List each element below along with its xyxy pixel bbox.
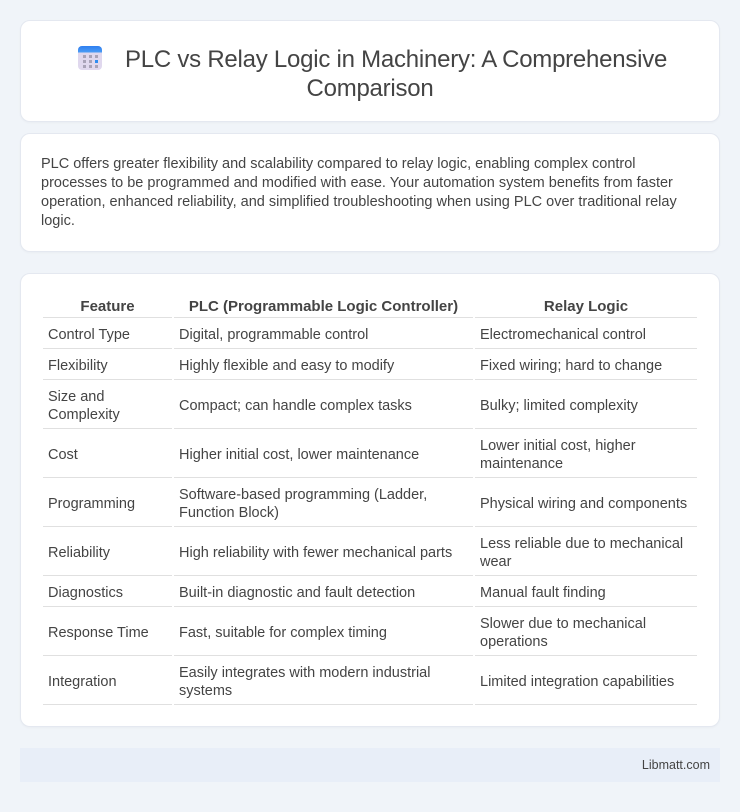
footer source text: Libmatt.com xyxy=(642,758,710,772)
table: Flexibility xyxy=(48,358,108,374)
table: Fast, suitable for complex timing xyxy=(179,625,387,641)
table: Bulky; limited complexity xyxy=(480,398,638,414)
table: PLC (Programmable Logic Controller) xyxy=(189,298,458,315)
table: Less reliable due to mechanical xyxy=(480,536,683,552)
panel: comparison table xyxy=(20,273,720,727)
table: Physical wiring and components xyxy=(480,496,687,512)
heading: Comparison xyxy=(306,75,434,102)
table: Compact; can handle complex tasks xyxy=(179,398,412,414)
table: Size and xyxy=(48,389,104,405)
table: Slower due to mechanical xyxy=(480,616,646,632)
table: Lower initial cost, higher xyxy=(480,438,636,454)
table: Control Type xyxy=(48,327,130,343)
table: Software-based programming (Ladder, xyxy=(179,487,427,503)
table: Manual fault finding xyxy=(480,585,606,601)
intro paragraph: processes to be programmed and modified with ease. Your automation system benefits from faster xyxy=(41,175,673,191)
panel: intro text xyxy=(20,133,720,252)
table: Integration xyxy=(48,674,117,690)
table: Built-in diagnostic and fault detection xyxy=(179,585,415,601)
table header xyxy=(80,298,628,315)
table: Digital, programmable control xyxy=(179,327,368,343)
intro paragraph xyxy=(41,156,677,229)
table: Programming xyxy=(48,496,135,512)
table: Response Time xyxy=(48,625,149,641)
table: Relay Logic xyxy=(544,298,628,315)
table: Cost xyxy=(48,447,78,463)
table: systems xyxy=(179,683,232,699)
icon: calendar xyxy=(78,46,102,70)
heading xyxy=(125,46,667,102)
table: Fixed wiring; hard to change xyxy=(480,358,662,374)
table: Reliability xyxy=(48,545,110,561)
table: Electromechanical control xyxy=(480,327,646,343)
table: maintenance xyxy=(480,456,563,472)
table: Limited integration capabilities xyxy=(480,674,674,690)
panel: title card xyxy=(20,20,720,122)
table: wear xyxy=(480,554,511,570)
table: Complexity xyxy=(48,407,120,423)
table: Higher initial cost, lower maintenance xyxy=(179,447,419,463)
intro paragraph: logic. xyxy=(41,213,75,229)
table: Feature xyxy=(80,298,135,315)
table: operations xyxy=(480,634,548,650)
table: High reliability with fewer mechanical parts xyxy=(179,545,452,561)
heading: PLC vs Relay Logic in Machinery: A Comprehensive xyxy=(125,46,667,73)
table: Easily integrates with modern industrial xyxy=(179,665,430,681)
footer xyxy=(20,748,720,782)
table: Highly flexible and easy to modify xyxy=(179,358,394,374)
table: Diagnostics xyxy=(48,585,123,601)
table: Function Block) xyxy=(179,505,279,521)
intro paragraph: operation, enhanced reliability, and simplified troubleshooting when using PLC over traditional relay xyxy=(41,194,677,210)
intro paragraph: PLC offers greater flexibility and scalability compared to relay logic, enabling complex control xyxy=(41,156,636,172)
